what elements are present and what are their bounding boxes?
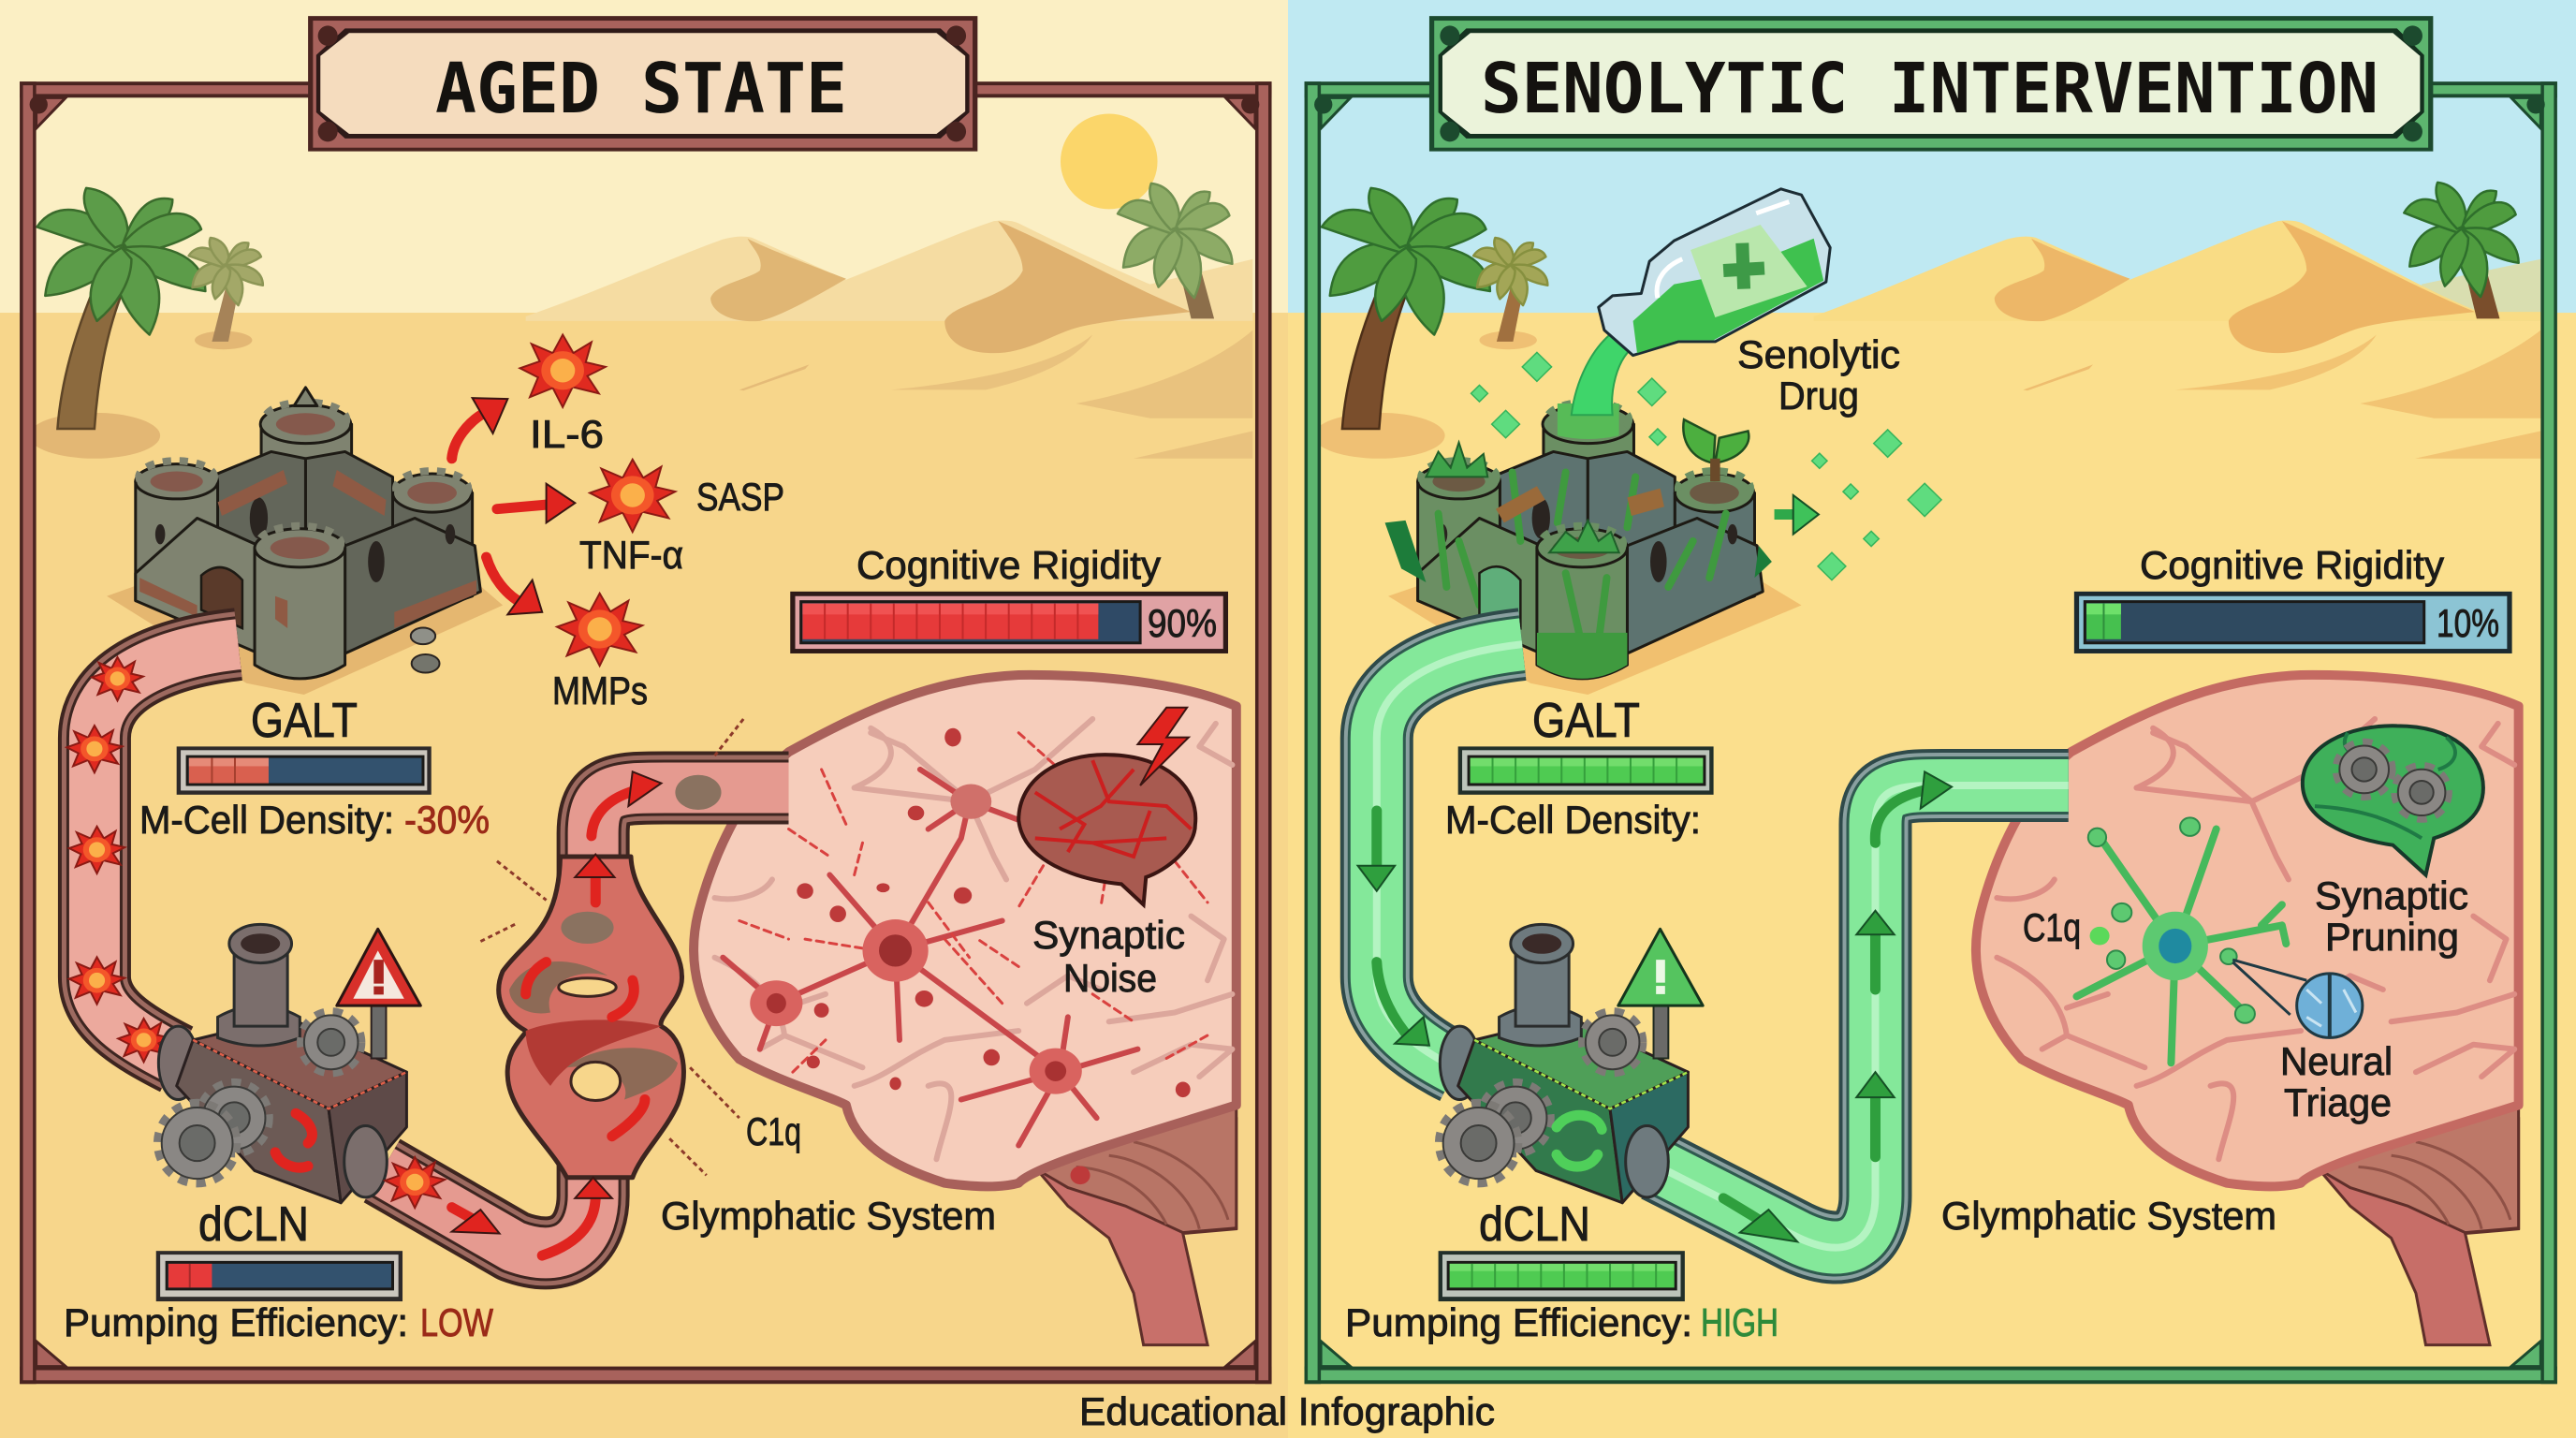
icon: ruined GALT castle xyxy=(136,388,480,673)
icon: senolytic drug bottle xyxy=(1599,189,1830,356)
panel: aged state xyxy=(0,0,1288,1438)
label: synaptic noise: Noise xyxy=(1063,956,1157,1000)
arrow: to IL-6 xyxy=(452,398,507,459)
castle shadow xyxy=(1388,576,1801,695)
warning sign xyxy=(337,929,420,1058)
neuron: healthy xyxy=(2076,817,2286,1063)
label: C1q: C1q xyxy=(2023,905,2081,949)
bar: GALT M-cell density full xyxy=(1458,746,1714,795)
label: synaptic pruning: Synaptic xyxy=(2315,873,2468,917)
label: TNF-alpha: TNF-α xyxy=(579,533,683,577)
brain: aged xyxy=(694,675,1237,1345)
sand ground xyxy=(1288,313,2576,1438)
label: M-cell density: M-Cell Density: xyxy=(1445,798,1701,842)
label: SASP: SASP xyxy=(696,475,784,519)
label: pumping efficiency: Pumping Efficiency: xyxy=(1345,1300,1692,1344)
frame: senolytic intervention xyxy=(1305,81,2557,1384)
value: LOW: LOW xyxy=(420,1300,493,1344)
icon: cracked brain, synaptic noise xyxy=(1018,755,1195,904)
label: glymphatic system: Glymphatic System xyxy=(1941,1194,2276,1238)
label: senolytic drug: Drug xyxy=(1778,374,1859,418)
heading: senolytic intervention: SENOLYTIC INTERVENTION xyxy=(1481,49,2378,129)
icon: MMPs burst xyxy=(557,594,642,666)
bar: cognitive rigidity 90% xyxy=(790,592,1228,653)
palm tree: small left xyxy=(1473,238,1547,349)
icon: healthy pump dCLN xyxy=(1440,924,1688,1203)
panel: senolytic intervention xyxy=(1288,0,2576,1438)
sun xyxy=(1061,113,1158,209)
bar: GALT M-cell density xyxy=(177,746,432,795)
arrow: to TNF-alpha xyxy=(497,484,575,522)
label: pumping efficiency: Pumping Efficiency: xyxy=(64,1300,408,1344)
palm tree: large left xyxy=(1313,188,1490,459)
palm tree: right xyxy=(1118,183,1232,318)
bar: dCLN pumping efficiency xyxy=(156,1251,402,1301)
sky background xyxy=(1288,0,2576,314)
bar: cognitive rigidity 10% xyxy=(2074,592,2512,653)
clean lymph pipe: castle to pump xyxy=(1377,644,1522,1068)
icon: lightning bolt xyxy=(1137,708,1189,785)
label: M-cell density: M-Cell Density: xyxy=(139,798,394,842)
label: glymphatic system: Glymphatic System xyxy=(661,1194,996,1238)
label: dCLN: dCLN xyxy=(1479,1197,1590,1252)
clean glymphatic pipe xyxy=(1658,785,2069,1248)
neurons in brain: damaged xyxy=(723,733,1208,1146)
icon: rusty pump dCLN xyxy=(158,924,406,1203)
sky background xyxy=(0,0,1288,314)
outlet burst xyxy=(385,1157,445,1208)
arrow: clearance out of castle xyxy=(1775,495,1819,535)
icon: TNF-alpha burst xyxy=(590,460,675,532)
icon: neural triage orb xyxy=(2232,960,2363,1037)
icon: front castle tower with moss xyxy=(1537,521,1627,679)
icon: green brain with gears, synaptic pruning xyxy=(2303,726,2483,875)
label: neural triage xyxy=(2280,1039,2393,1124)
label: neural triage: Neural xyxy=(2280,1039,2393,1083)
label: synaptic pruning xyxy=(2315,873,2468,959)
sand dunes xyxy=(526,220,1252,459)
sand ground xyxy=(0,313,1288,1438)
arrows in pipe xyxy=(452,771,661,1255)
footer caption: Educational Infographic xyxy=(1079,1389,1495,1433)
title plaque: senolytic intervention xyxy=(1429,16,2433,152)
frame: aged state xyxy=(20,81,1272,1384)
icon: sapling on tower xyxy=(1683,419,1749,481)
heading: aged state: AGED STATE xyxy=(435,49,847,129)
inflamed lymph pipe: castle to pump xyxy=(95,644,239,1059)
label: synaptic noise xyxy=(1032,913,1185,1000)
debris lines xyxy=(480,719,743,1175)
label: cognitive rigidity: Cognitive Rigidity xyxy=(856,543,1161,587)
value: 90%: 90% xyxy=(1148,601,1217,645)
castle shadow xyxy=(107,576,503,695)
label: dCLN: dCLN xyxy=(198,1197,309,1252)
clogged glymphatic pipe xyxy=(382,775,788,1253)
brain: clear xyxy=(1976,675,2519,1345)
label: GALT: GALT xyxy=(1532,694,1640,748)
arrow: to MMPs xyxy=(487,557,542,614)
sand dunes xyxy=(1814,220,2540,459)
palm tree: small left xyxy=(189,238,263,349)
value: -30%: -30% xyxy=(404,798,490,842)
label: GALT: GALT xyxy=(251,694,358,748)
label: senolytic drug xyxy=(1737,332,1900,418)
safe sign xyxy=(1618,929,1703,1058)
palm tree: right xyxy=(2404,183,2519,318)
label: cognitive rigidity: Cognitive Rigidity xyxy=(2140,543,2444,587)
green flow arrows xyxy=(1358,771,1952,1241)
label: neural triage: Triage xyxy=(2284,1080,2392,1124)
icon: restored GALT castle with vines xyxy=(1385,388,1772,653)
label: MMPs: MMPs xyxy=(552,668,648,712)
icon: IL-6 burst xyxy=(520,335,606,407)
label: synaptic pruning: Pruning xyxy=(2325,915,2459,959)
palm tree: large left xyxy=(29,188,205,459)
label: synaptic noise: Synaptic xyxy=(1032,913,1185,957)
title plaque: aged state xyxy=(308,16,977,152)
label: IL-6: IL-6 xyxy=(530,412,604,456)
value: 10%: 10% xyxy=(2437,601,2499,645)
green drug stream xyxy=(1572,332,1632,415)
value: HIGH: HIGH xyxy=(1701,1300,1778,1344)
red debris dots xyxy=(797,728,1191,1184)
bar: dCLN pumping efficiency full xyxy=(1439,1251,1685,1301)
inflammation bursts in pipe xyxy=(66,657,169,1062)
label: C1q: C1q xyxy=(746,1109,801,1153)
medicine sparkles xyxy=(1471,352,1941,580)
label: senolytic drug: Senolytic xyxy=(1737,332,1900,376)
icon: front castle tower xyxy=(255,526,345,679)
